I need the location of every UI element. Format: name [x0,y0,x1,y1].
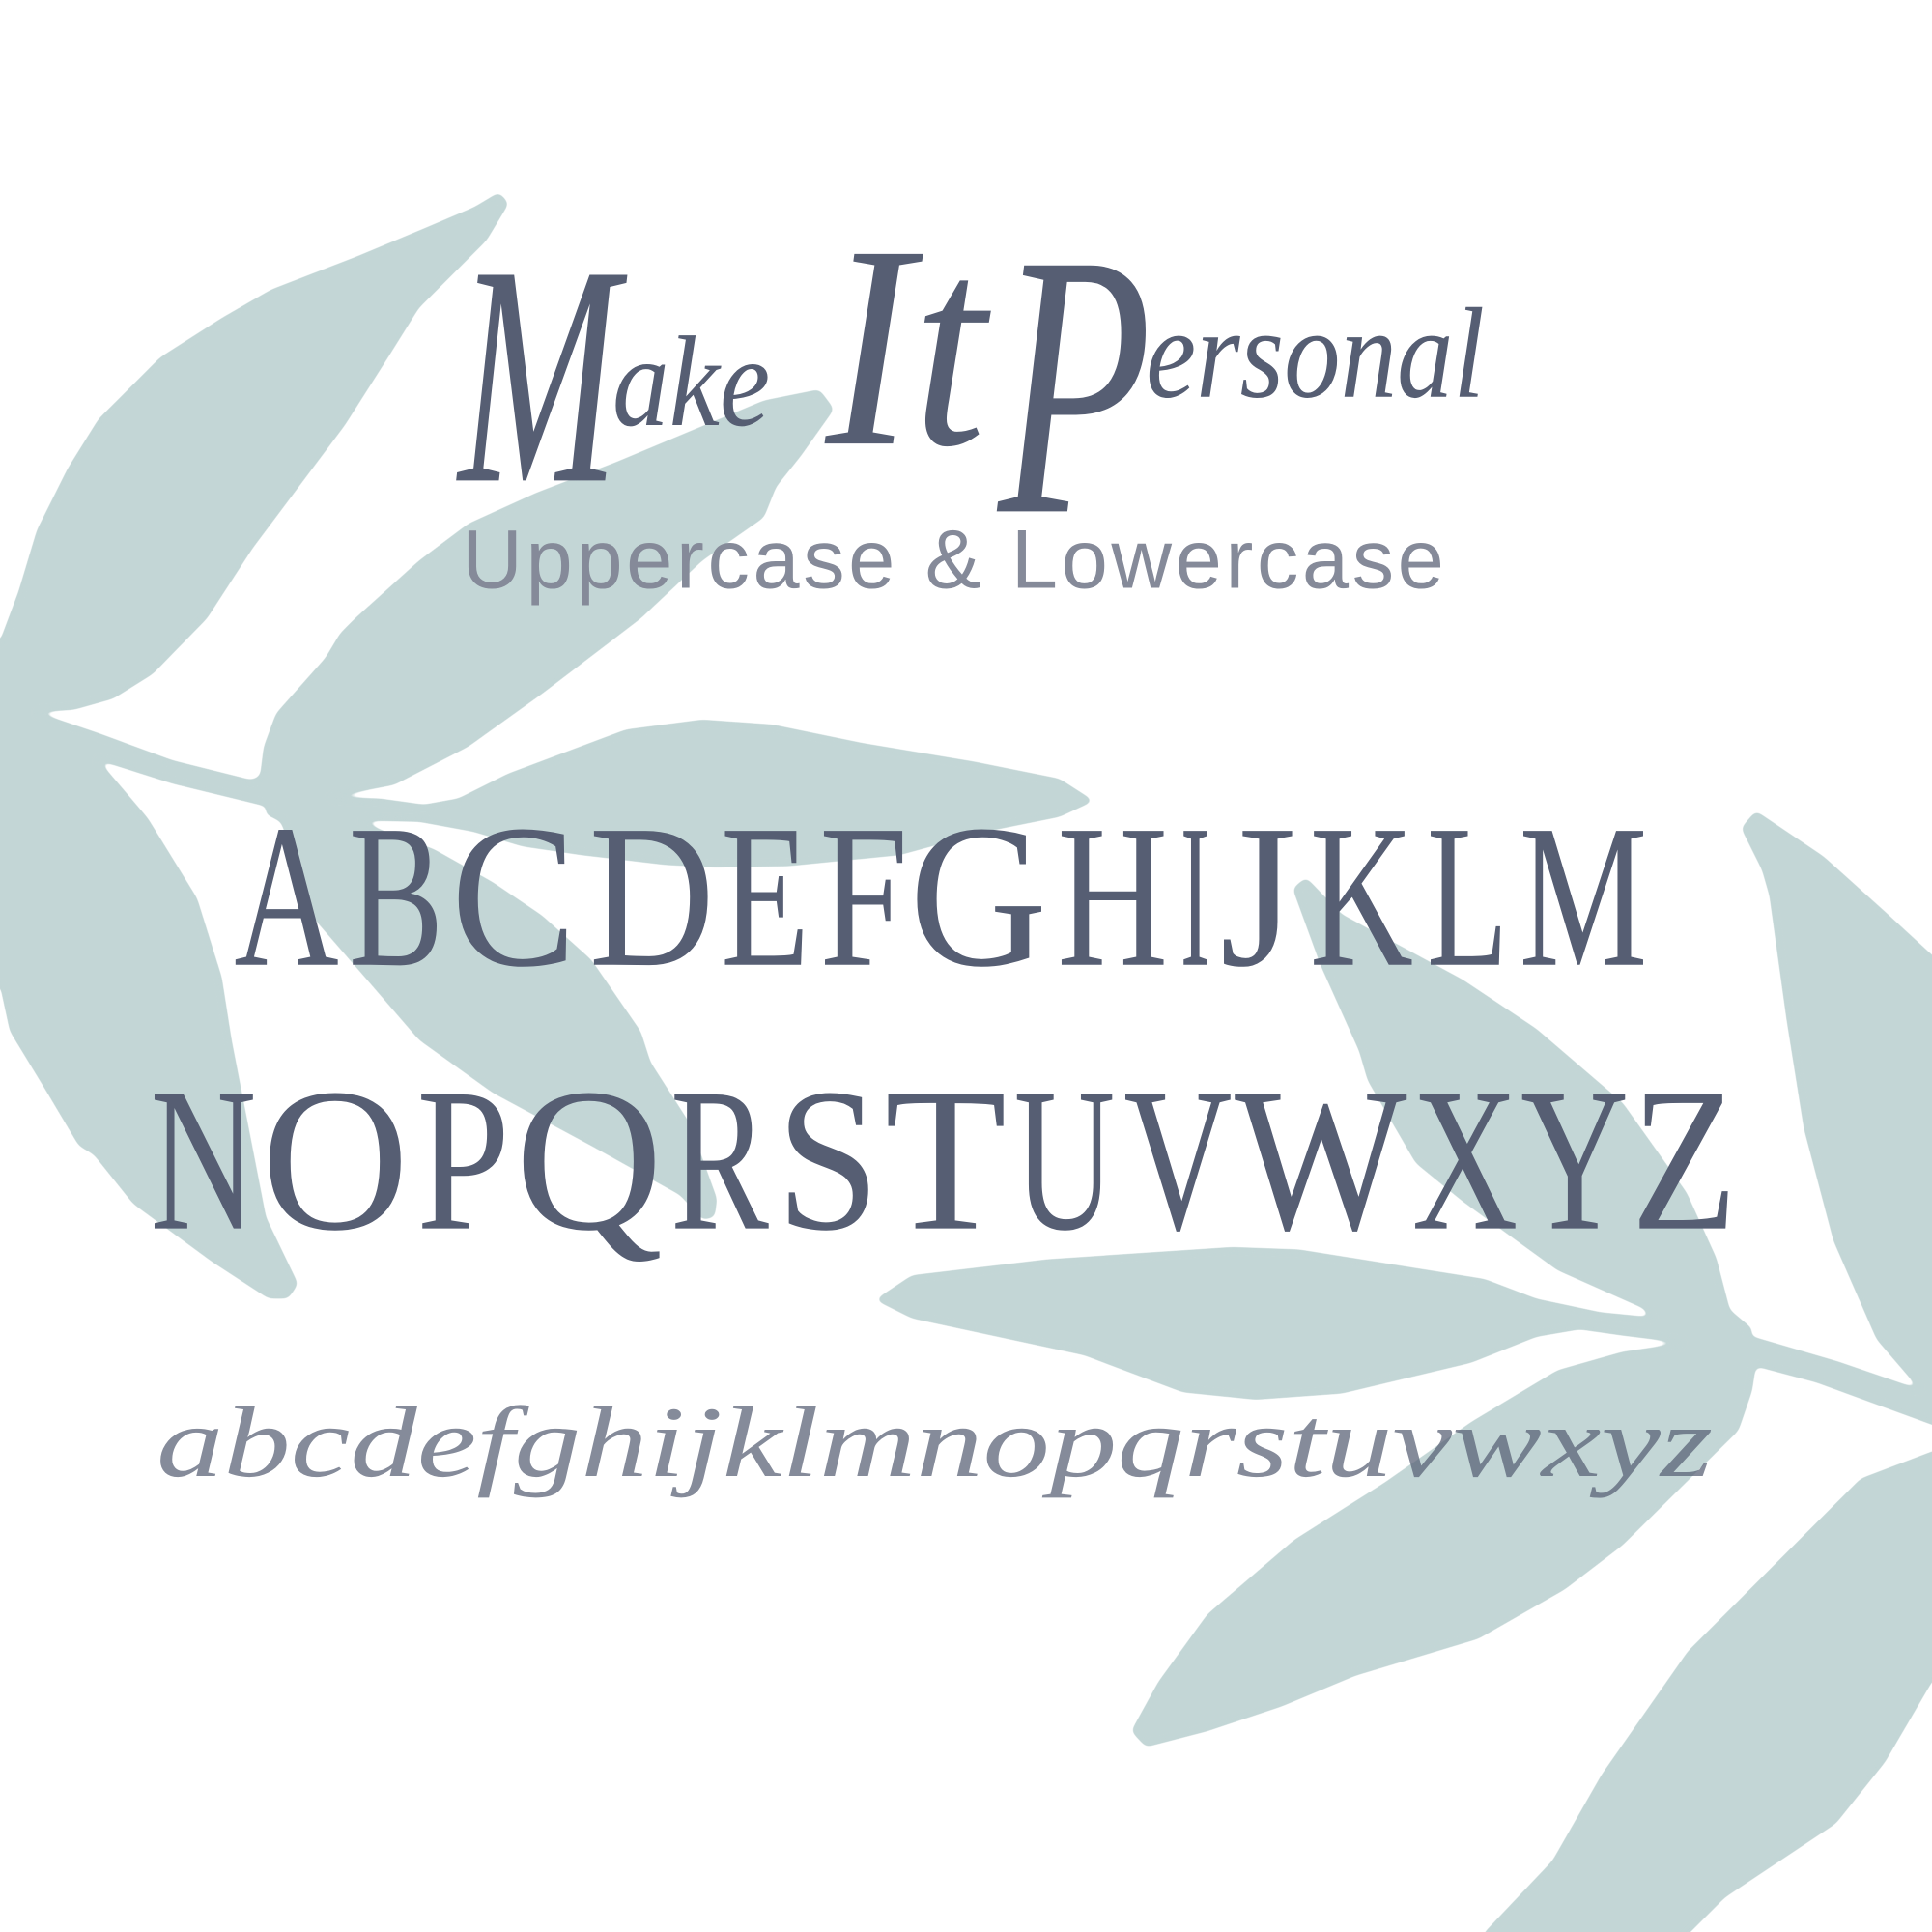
title: Make It Personal: M [455,201,630,549]
uppercase alphabet row A to M: I [1180,782,1210,1009]
uppercase alphabet row A to M [234,782,1647,1009]
uppercase alphabet row A to M: B [349,782,443,1009]
uppercase alphabet row N to Z: S [777,1046,880,1273]
uppercase alphabet row N to Z: Z [1632,1046,1737,1273]
uppercase alphabet row A to M: H [1057,782,1168,1009]
uppercase alphabet row A to M: M [1520,782,1647,1009]
uppercase alphabet row A to M: C [451,782,577,1009]
uppercase alphabet row A to M: G [909,782,1047,1009]
uppercase alphabet row N to Z: N [151,1046,256,1273]
uppercase alphabet row N to Z: Q [515,1046,663,1273]
uppercase alphabet row A to M: E [721,782,810,1009]
uppercase alphabet row N to Z: O [261,1046,409,1273]
title: Make It Personal [455,177,1485,593]
uppercase alphabet row N to Z [151,1046,1737,1273]
uppercase alphabet row N to Z: Y [1520,1046,1629,1273]
uppercase alphabet row N to Z: W [1235,1046,1407,1273]
uppercase alphabet row A to M: K [1310,782,1413,1009]
uppercase alphabet row N to Z: V [1123,1046,1233,1273]
title: Make It Personal: ake [612,310,770,453]
uppercase alphabet row N to Z: R [670,1046,769,1273]
uppercase alphabet row N to Z: P [416,1046,510,1273]
subtitle: Uppercase & Lowercase [462,512,1444,606]
uppercase alphabet row A to M: A [234,782,339,1009]
uppercase alphabet row N to Z: T [885,1046,1007,1273]
uppercase alphabet row A to M: L [1427,782,1508,1009]
uppercase alphabet row A to M: J [1220,782,1296,1009]
left leaf branch [0,192,1094,1298]
uppercase alphabet row N to Z: X [1412,1046,1518,1273]
title: Make It Personal: ersonal [1146,282,1485,425]
right leaf branch [875,810,1932,1932]
title: Make It Personal: P [994,177,1152,593]
title: Make It Personal: It [821,185,995,506]
uppercase alphabet row A to M: F [819,782,908,1009]
lowercase alphabet: abcdefghijklmnopqrstuvwxyz [156,1386,1713,1498]
uppercase alphabet row A to M: D [589,782,715,1009]
uppercase alphabet row N to Z: U [1014,1046,1115,1273]
